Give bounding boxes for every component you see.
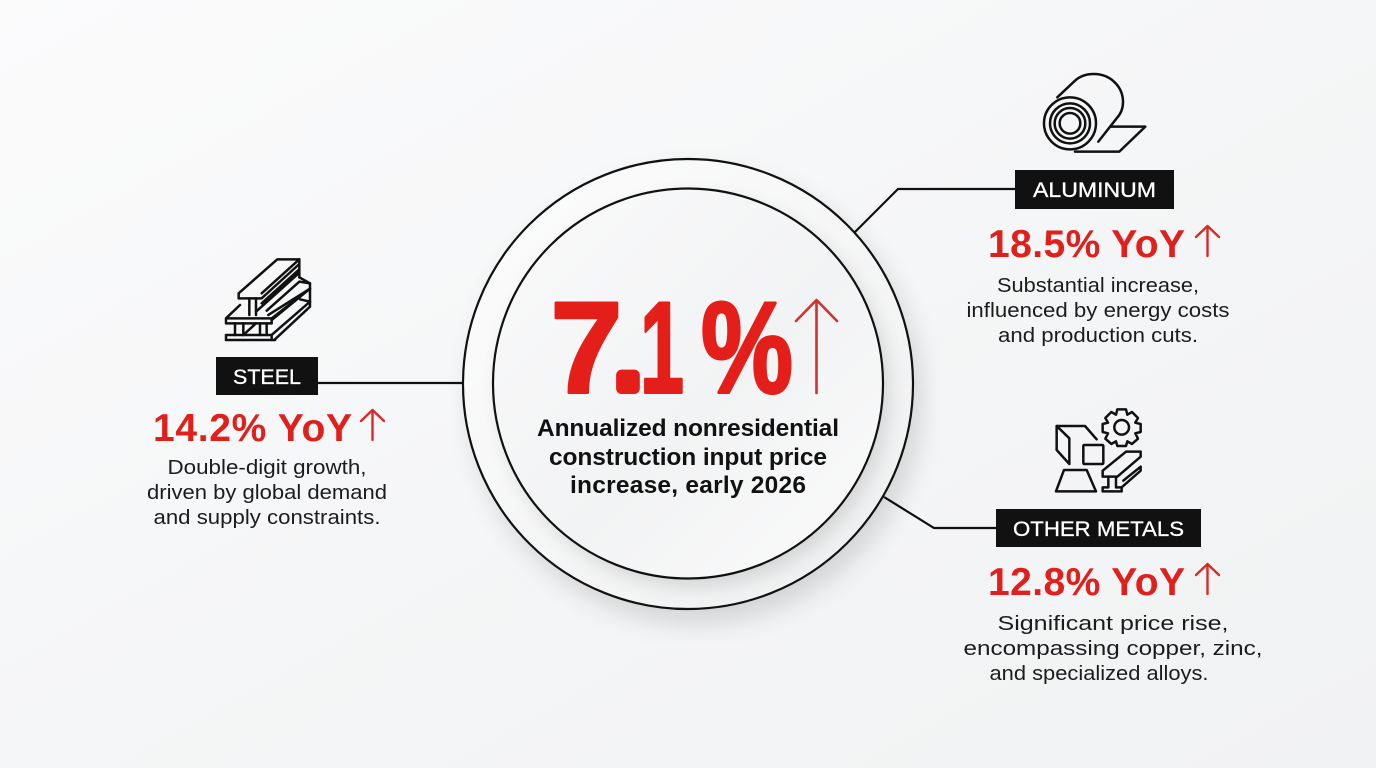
description: aluminum [966, 274, 1230, 347]
panel: aluminum [966, 74, 1230, 347]
figure: aluminum: 18.5% YoY [988, 223, 1185, 266]
description: aluminum: influenced by energy costs [966, 299, 1230, 322]
description: other metals: Significant price rise, [998, 612, 1228, 635]
connector: steel to centre [318, 382, 464, 384]
figure: steel: 14.2% YoY [153, 407, 352, 450]
connector: other metals to centre [884, 497, 996, 528]
description: steel: and supply constraints. [154, 506, 380, 529]
headline figure: % [701, 274, 793, 420]
connector: aluminum to centre [855, 189, 1015, 232]
label: steel [216, 357, 318, 395]
icon: steel beams [226, 259, 310, 340]
icon: other metals [1056, 409, 1141, 491]
central caption: Annualized nonresidential [537, 415, 839, 442]
description: steel: Double-digit growth, [168, 456, 366, 479]
description: aluminum: Substantial increase, [997, 274, 1199, 297]
description: steel: driven by global demand [147, 481, 387, 504]
icon: aluminum roll [1044, 74, 1145, 152]
label: other metals [996, 509, 1201, 547]
label: steel: STEEL [233, 366, 301, 389]
label: other metals: OTHER METALS [1013, 518, 1184, 541]
headline figure [550, 274, 793, 420]
headline arrow [796, 300, 837, 393]
label: aluminum: ALUMINUM [1033, 179, 1156, 202]
panel: steel [147, 259, 387, 529]
central caption [537, 415, 839, 499]
headline figure: . [616, 308, 641, 408]
headline figure: 1 [640, 274, 684, 420]
description: aluminum: and production cuts. [998, 324, 1198, 347]
description: other metals [964, 612, 1262, 685]
arrow: aluminum [1196, 226, 1219, 256]
panel: other metals [964, 409, 1262, 685]
central circle [463, 159, 920, 622]
description: steel [147, 456, 387, 529]
arrow: steel [361, 410, 384, 440]
label: aluminum [1015, 170, 1174, 209]
figure: other metals: 12.8% YoY [988, 561, 1185, 604]
description: other metals: encompassing copper, zinc, [964, 637, 1262, 660]
central caption: increase, early 2026 [570, 472, 806, 499]
arrow: other metals [1196, 564, 1219, 594]
central caption: construction input price [549, 444, 827, 471]
description: other metals: and specialized alloys. [990, 662, 1208, 685]
headline figure: 7 [550, 274, 622, 420]
